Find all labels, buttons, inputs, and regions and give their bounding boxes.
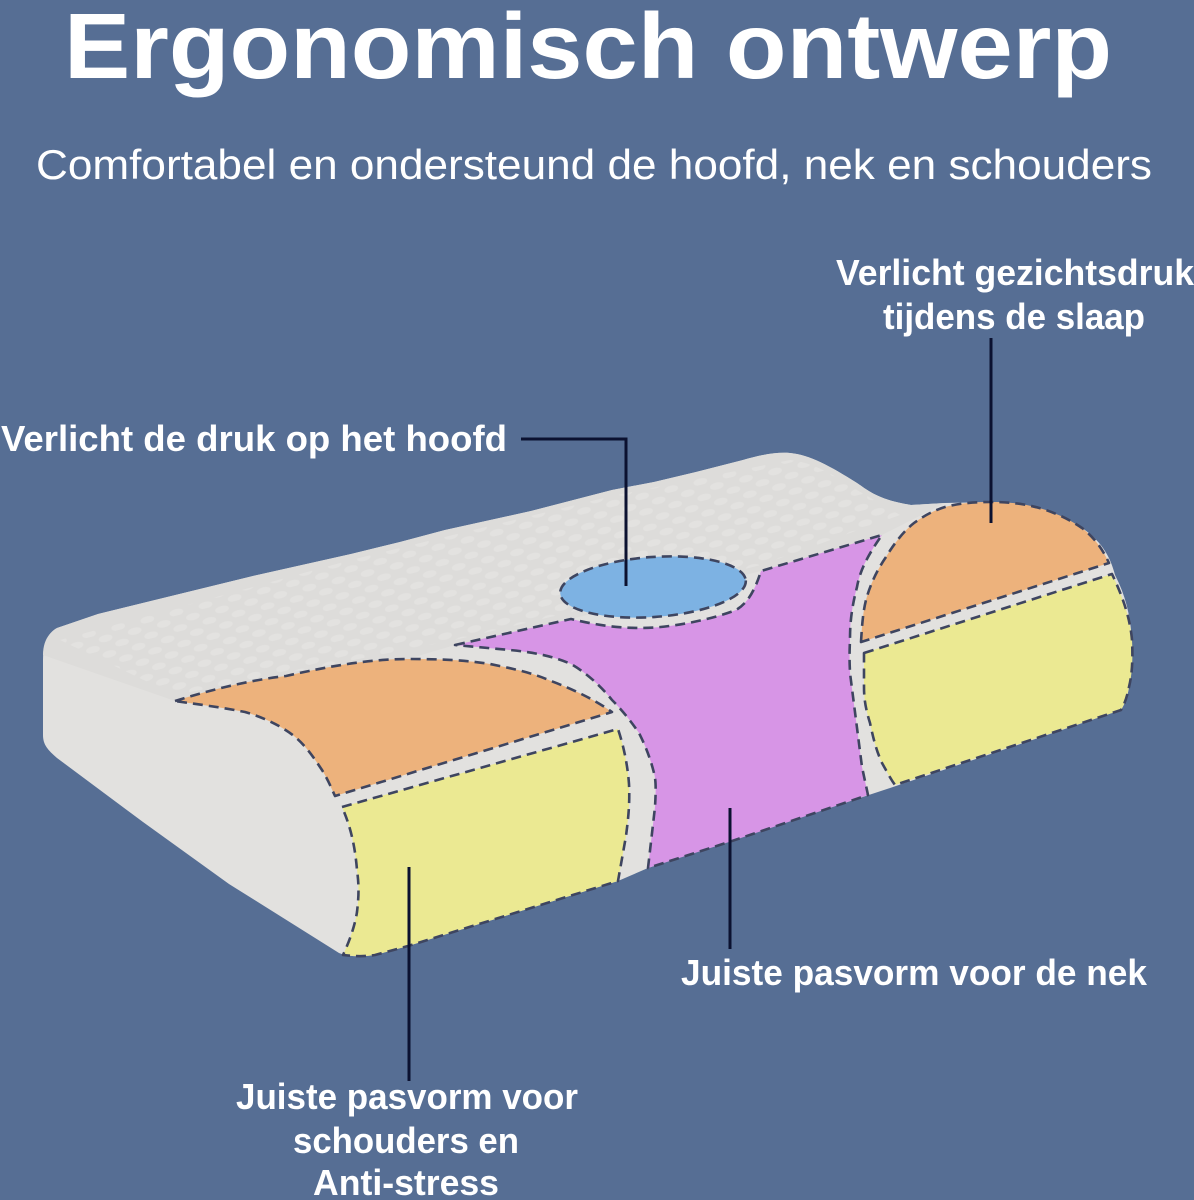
pillow body: [43, 453, 1132, 956]
zone: neck fit: [455, 535, 882, 868]
zone: front shoulder yellow: [342, 729, 629, 956]
callout: face: [836, 252, 1194, 523]
zone: front shoulder orange: [175, 659, 612, 796]
callout: face: Verlicht gezichtsdruk: [836, 252, 1194, 293]
pillow surface bumps: [60, 460, 900, 695]
callout: face: tijdens de slaap: [883, 296, 1145, 337]
zone: head pressure: [558, 551, 748, 623]
pillow illustration: [43, 453, 1132, 956]
callout: head: [1, 418, 626, 586]
callout: head: Verlicht de druk op het hoofd: [1, 418, 507, 459]
callout: shoulders: [236, 867, 578, 1200]
callout: shoulders: schouders en: [293, 1120, 519, 1161]
callout: neck: Juiste pasvorm voor de nek: [681, 952, 1148, 993]
zone: back face yellow: [864, 574, 1132, 785]
subtitle: Comfortabel en ondersteund de hoofd, nek en schouders: [36, 141, 1152, 188]
pillow textured top: [43, 453, 945, 701]
zone: back face orange: [861, 502, 1109, 642]
callout: shoulders: Juiste pasvorm voor: [236, 1076, 578, 1117]
